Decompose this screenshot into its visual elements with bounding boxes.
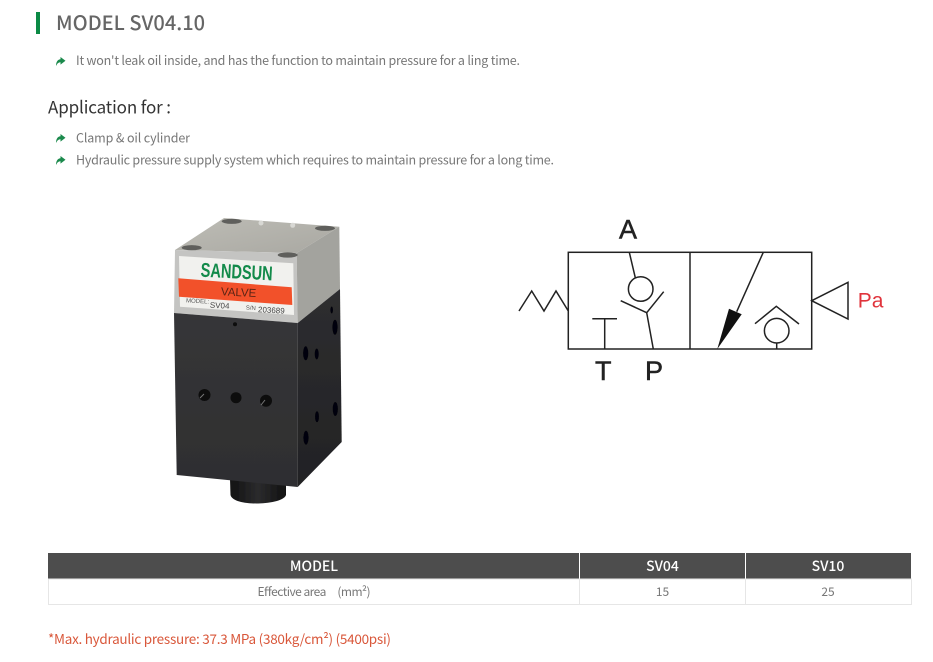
port labels [595,214,884,386]
port pins [200,394,265,405]
ports on the front face [198,322,272,407]
table row: 25 [821,583,835,600]
pilot triangle [812,282,848,319]
specification table [48,553,912,604]
port labels: T [595,356,612,386]
label text: S/N [246,306,256,312]
label text: VALVE [221,286,257,300]
table header: MODEL [290,556,338,576]
note: maximum pressure: *Max. hydraulic pressure: 37.3 MPa (380kg/cm²) (5400psi) [48,628,391,648]
label text [186,259,288,316]
table header: SV04 [646,556,679,576]
label text: MODEL: [186,298,210,306]
silver top face [175,218,339,253]
heading: application: Application for : [48,93,171,118]
label text: SANDSUN [200,260,273,285]
text block: application list: Hydraulic pressure supply system which requires to maintain pressure for a long time. [76,149,554,168]
table header: SV10 [812,556,844,576]
product photo: SV04 valve [174,218,342,504]
nut at the base of the valve [230,478,286,504]
table header [48,553,911,579]
right position: check valve [755,306,799,349]
bolts on top [182,219,335,258]
dark front face [174,313,298,487]
right position: flow arrow [717,252,763,349]
label plate [179,256,294,315]
label text: 203689 [258,305,285,316]
text block: application list [56,127,554,168]
silver side face [297,227,340,323]
ports on the side face [303,306,338,445]
text block: application list: Clamp & oil cylinder [76,127,190,146]
port labels: A [619,214,637,244]
spring [519,291,568,311]
valve body [568,252,812,349]
hydraulic symbol diagram [519,214,884,386]
port labels: Pa [858,290,884,312]
left position: check valve and ports [592,252,664,349]
table row [48,579,912,604]
port labels: P [645,356,663,386]
heading: model name: MODEL SV04.10 [56,7,205,36]
red label band [178,278,292,305]
table row: Effective area (mm²) [258,583,370,600]
table row: 15 [656,583,669,600]
dark side face [298,289,342,487]
silver front face [174,250,298,323]
text block: feature: It won't leak oil inside, and has the function to maintain pressure for a ling time. [76,50,520,69]
label text: SV04 [210,301,230,311]
